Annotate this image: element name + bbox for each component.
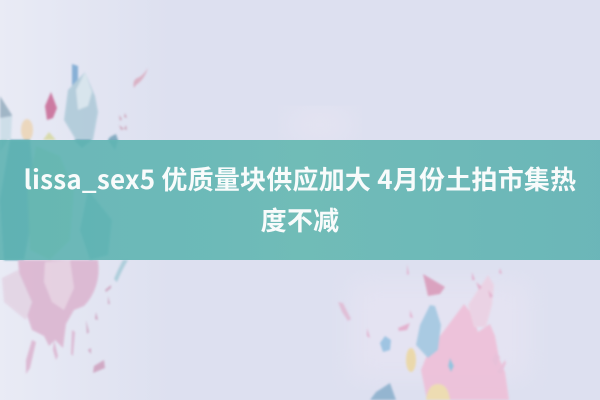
pink paint splash and crystals lower right [338, 264, 509, 400]
crystals behind the band [0, 140, 118, 260]
crystal cluster upper left [0, 64, 148, 141]
title: lissa_sex5 优质量块供应加大 4月份土拍市集热度不减 [24, 160, 576, 238]
pink paint splash lower left [2, 260, 128, 374]
teal title band [0, 140, 600, 260]
